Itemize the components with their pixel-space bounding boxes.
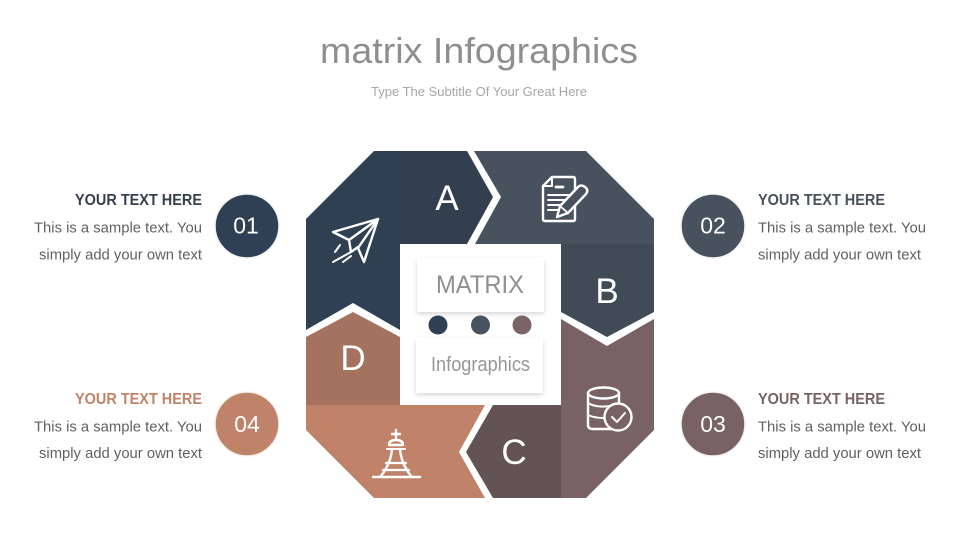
segment: B: B [595,272,619,311]
item 01 text: This is a sample text. You [34,220,202,236]
center dots [428,316,532,334]
icon: chess king [373,430,420,477]
segment: mauve with database icon [561,319,654,498]
item 03 badge: 03 [700,411,726,437]
center card: Infographics [416,338,543,393]
icon: database with check [588,388,632,430]
item 02 text [758,192,926,264]
item 04 text: This is a sample text. You [34,418,202,436]
item 01 badge: 01 [233,212,259,238]
item 02 text: This is a sample text. You [758,220,926,236]
item 04 text [34,391,203,462]
item 02 text: YOUR TEXT HERE [758,192,885,209]
item 04 badge [215,392,279,456]
item 01 text: YOUR TEXT HERE [75,192,202,209]
segment: A [400,151,493,244]
item 03 text: YOUR TEXT HERE [758,391,885,408]
item 03 text: simply add your own text [758,445,922,462]
item 02 text: simply add your own text [758,246,922,264]
icon: paper plane [333,219,378,262]
segment: A: A [435,179,459,218]
item 01 badge [215,194,279,258]
item 02 badge: 02 [700,212,726,238]
item 02 badge [681,194,745,258]
segment: C [466,405,561,498]
segment: navy with paper plane [306,151,400,330]
segment: orange with chess piece [306,405,485,498]
item 01 text: simply add your own text [39,246,203,264]
segment: C: C [501,433,527,472]
icon: document and pencil [543,177,587,221]
item 04 text: YOUR TEXT HERE [75,391,202,408]
segment: B [561,244,654,337]
item 04 text: simply add your own text [39,445,203,462]
item 04 badge: 04 [234,411,260,437]
subtitle: Type The Subtitle Of Your Great Here [371,84,587,99]
center card: MATRIX [417,258,544,312]
item 03 badge [681,392,745,456]
title: matrix Infographics [320,30,638,71]
segment: D: D [340,339,366,378]
matrix diagram [306,151,654,498]
segment: D [306,312,400,405]
item 03 text [758,391,926,462]
item 03 text: This is a sample text. You [758,418,926,436]
center card: Infographics: Infographics [431,354,530,376]
segment: grey with document icon [474,151,654,244]
center card: MATRIX: MATRIX [436,271,524,299]
item 01 text [34,192,203,264]
